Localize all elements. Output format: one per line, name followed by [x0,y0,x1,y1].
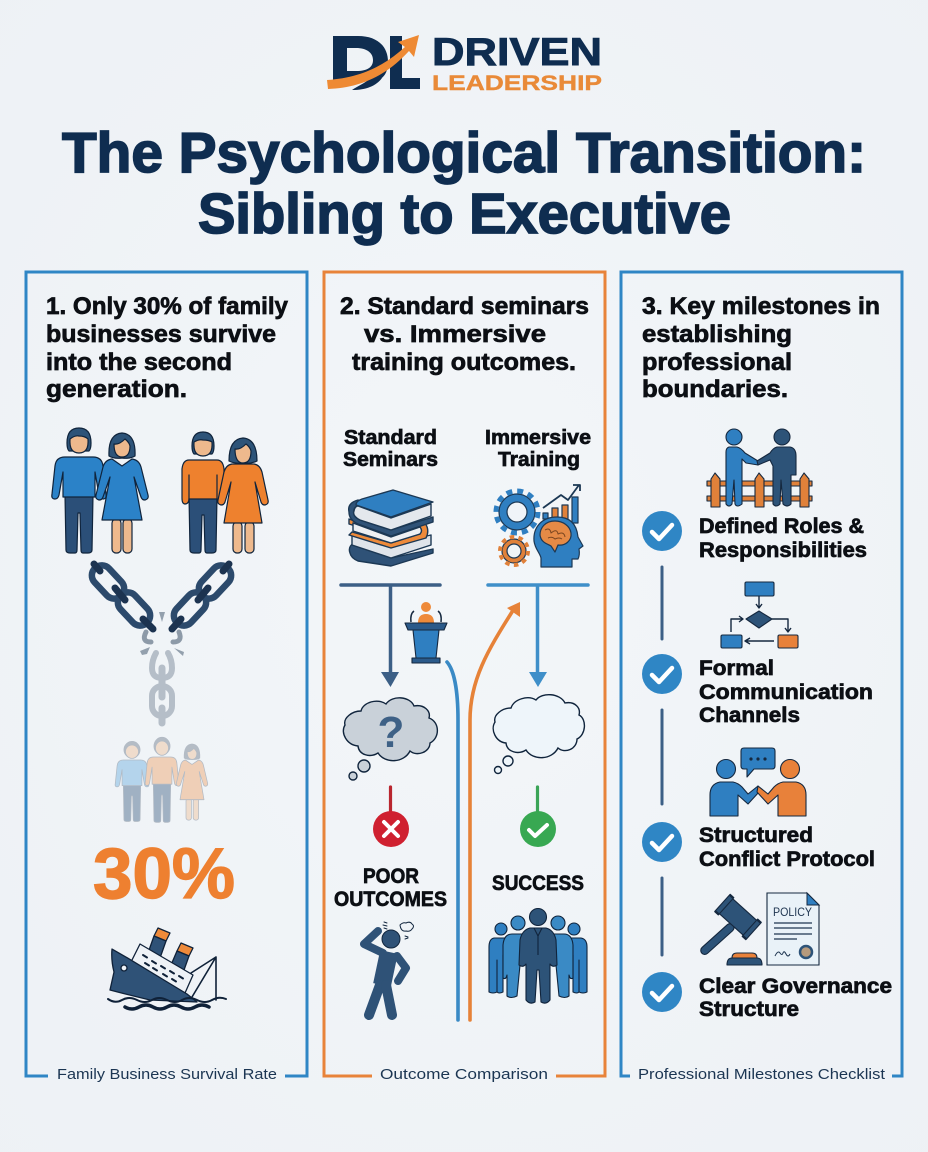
panel 1 heading: into the second [46,349,232,376]
panel 1 heading: 1. Only 30% of family [46,293,289,320]
curved blue line [447,662,458,1020]
panel 2 heading: 2. Standard seminars [340,293,589,320]
milestone 2 label: Formal [699,657,774,680]
icon: flowchart [721,582,798,648]
milestone 1 label: Responsibilities [699,539,867,562]
panel 2 heading [340,293,589,376]
icon: faded family [115,737,208,822]
logo wordmark: leadership: LEADERSHIP [432,71,602,95]
panel 2 heading: training outcomes. [352,349,576,376]
icon: broken chain [88,561,235,723]
panel 3 heading: boundaries. [642,376,788,403]
panel 3 heading: 3. Key milestones in [642,293,880,320]
caption: outcome comparison: Outcome Comparison [380,1066,548,1083]
broken fragments [144,632,180,642]
column label: immersive training: Immersive [485,427,591,449]
label: poor outcomes [334,865,447,911]
milestone 4 label: Structure [699,998,799,1021]
icon: confused person [364,922,414,1015]
milestone 3 label: Structured [699,824,813,847]
title: Sibling to Executive [198,182,731,246]
milestone 3 label [699,824,875,871]
icon: sinking ship [108,928,226,1009]
icon: empty thought cloud [493,695,584,774]
label: poor outcomes: OUTCOMES [334,888,447,911]
milestone 1 label [699,515,867,562]
question mark: ? [378,708,404,757]
panel: professional milestones [621,272,902,1083]
right column rule and arrow [488,585,588,687]
connector lines [660,567,664,955]
column label: standard seminars [343,427,438,471]
icon: thought cloud with question mark [343,698,437,780]
panel 1 heading: generation. [46,376,187,403]
icon: two couples [52,428,268,553]
panel: family business survival [26,272,307,1083]
icon: podium speaker [405,602,447,663]
milestone 3 label: Conflict Protocol [699,848,875,871]
statistic: 30%: 30% [93,835,235,914]
column label: immersive training: Training [498,449,580,471]
label: success: SUCCESS [492,872,584,895]
faded chain [152,653,172,723]
column label: standard seminars: Seminars [343,449,438,471]
milestone 2 label: Communication [699,681,873,704]
logo [327,31,602,95]
left chain [88,561,154,630]
logo wordmark: driven: DRIVEN [432,31,602,74]
column label: standard seminars: Standard [344,427,437,449]
milestone 4 label: Clear Governance [699,975,892,998]
title: The Psychological Transition: [62,121,866,185]
icon: gears brain and chart [496,485,583,567]
right chain [170,561,235,630]
icon: conflict discussion [710,748,806,816]
curved orange arrow [470,602,520,1020]
icon: policy document [767,893,819,965]
icon: policy document: POLICY [773,905,812,919]
milestone 1 label: Defined Roles & [699,515,864,538]
panel 3 heading: professional [642,349,792,376]
icon: handshake at fence [707,429,812,507]
caption: family business survival rate: Family Business Survival Rate [57,1066,277,1083]
panel 1 border [26,272,307,1076]
panel 1 heading: businesses survive [46,321,276,348]
milestone 2 label [699,657,873,727]
checkmark 2 [642,654,682,694]
icon: gavel [699,895,762,965]
icon: green check result [520,787,556,847]
panel 2 heading: vs. Immersive [364,321,546,348]
column label: immersive training [485,427,591,471]
icon: red cross result [373,787,409,847]
panel: outcome comparison [324,272,605,1083]
milestone 4 label [699,975,892,1021]
checkmark 4 [642,972,682,1012]
icon: stack of books [349,490,433,566]
caption: professional milestones checklist: Professional Milestones Checklist [638,1066,886,1083]
label: poor outcomes: POOR [363,865,419,888]
panel 3 heading: establishing [642,321,792,348]
checkmark 1 [642,511,682,551]
icon: successful team [489,908,587,1003]
left column rule and arrow [341,585,440,687]
panel 2 border [324,272,605,1076]
logo mark: DL with arrow [327,35,420,90]
panel 3 border [621,272,902,1076]
panel 3 heading [642,293,880,403]
milestone 2 label: Channels [699,704,800,727]
panel 1 heading [46,293,289,403]
checkmark 3 [642,822,682,862]
title [62,121,866,246]
